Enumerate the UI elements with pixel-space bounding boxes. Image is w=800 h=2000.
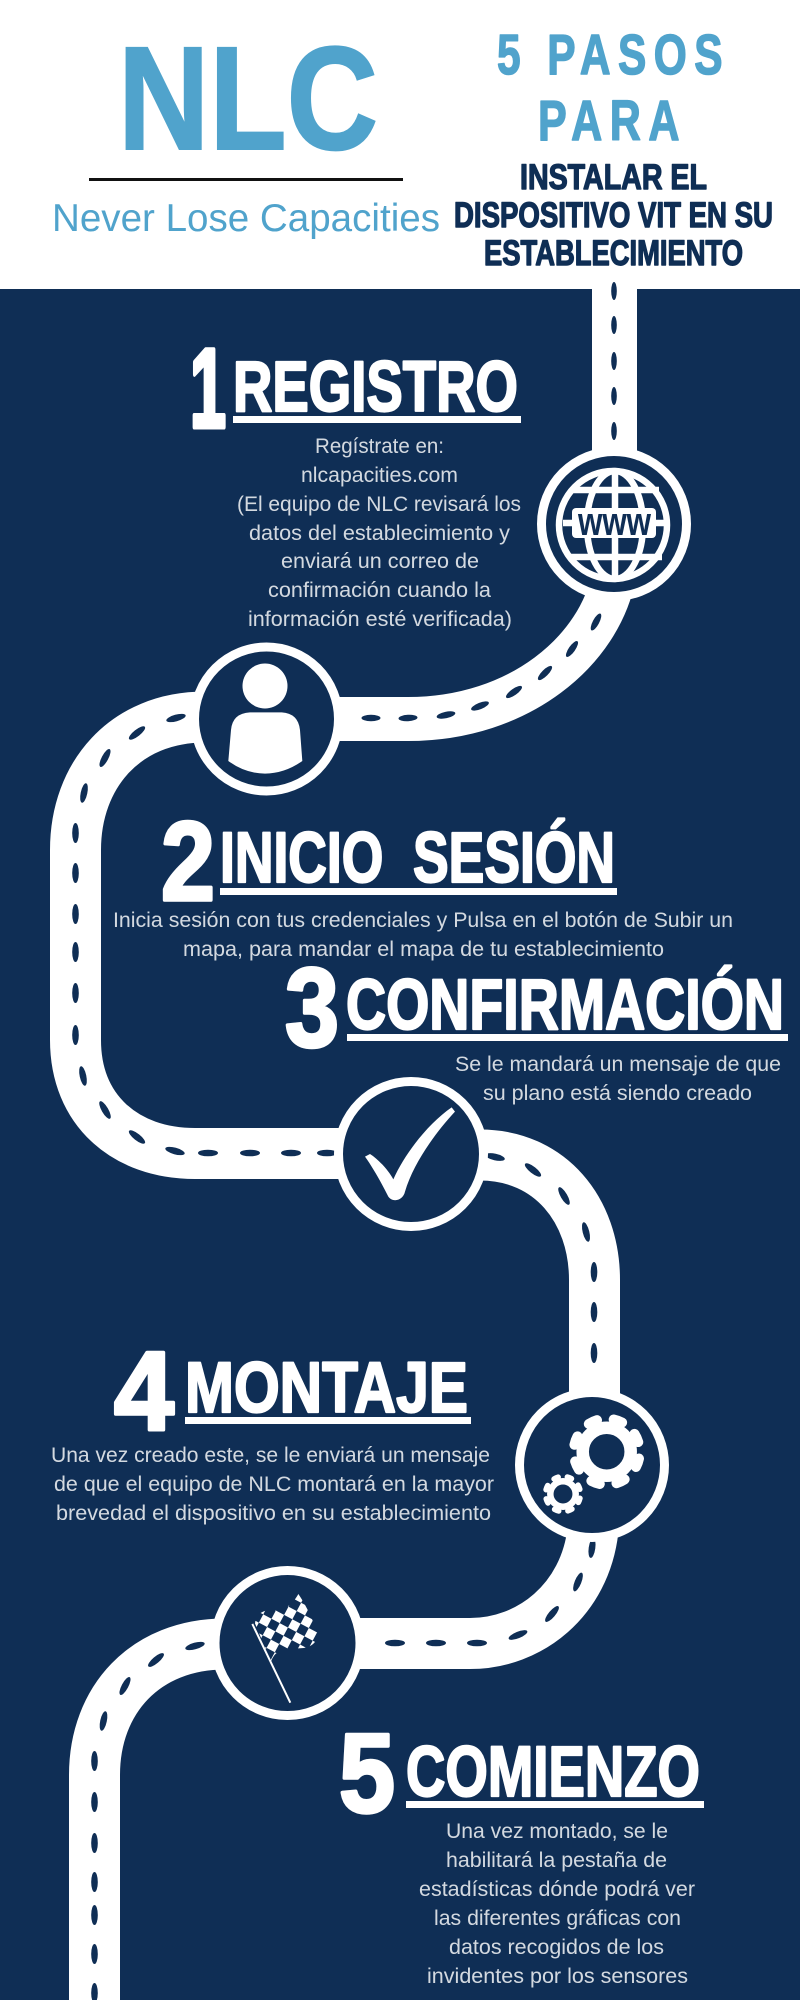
step 4 number: 4	[114, 1329, 174, 1454]
step 2 number: 2	[161, 799, 215, 924]
step 4: montaje	[51, 1329, 494, 1525]
step 1 body text: confirmación cuando la	[268, 579, 491, 602]
road: winding white path	[76, 278, 614, 2000]
icon: globe www: www	[577, 500, 652, 544]
step 2 body text: Inicia sesión con tus credenciales y Pulsa en el botón de Subir un	[113, 909, 733, 932]
step 1 body text: datos del establecimiento y	[249, 522, 511, 545]
road centre dashes	[72, 282, 617, 2000]
step 5 body text	[419, 1820, 695, 1988]
step 3 number: 3	[285, 945, 339, 1070]
step 5 body text: invidentes por los sensores	[427, 1965, 688, 1988]
step 4 underline	[185, 1417, 471, 1424]
step 1: registro	[190, 326, 521, 631]
step 5 body text: las diferentes gráficas con	[434, 1907, 681, 1930]
icon: globe www	[542, 452, 686, 596]
logo title NLC: NLC	[118, 17, 378, 181]
step 1 body text	[237, 435, 521, 631]
step 4 body text: Una vez creado este, se le enviará un mensaje	[51, 1444, 490, 1467]
step 2 title: INICIO SESIÓN	[220, 819, 615, 898]
step 2: inicio sesion	[113, 799, 733, 961]
step 3 body text: su plano está siendo creado	[483, 1082, 752, 1105]
step 4 body text: de que el equipo de NLC montará en la mayor	[54, 1473, 494, 1496]
icon: check mark	[338, 1082, 484, 1226]
step 1 body text: (El equipo de NLC revisará los	[237, 493, 521, 516]
step 1 number: 1	[190, 326, 226, 451]
step 1 body text: nlcapacities.com	[301, 464, 458, 487]
heading: para: PARA	[538, 89, 687, 153]
step 5 number: 5	[339, 1711, 395, 1836]
step 4 body text	[51, 1444, 494, 1525]
step 4 body text: brevedad el dispositivo en su establecimiento	[56, 1502, 491, 1525]
step 3 body text: Se le mandará un mensaje de que	[455, 1053, 781, 1076]
step 5: comienzo	[339, 1711, 704, 1988]
step 1 title: REGISTRO	[233, 348, 518, 427]
step 1 body text: información esté verificada)	[248, 608, 512, 631]
icon: checkered flag	[215, 1570, 360, 1716]
step 5 title: COMIENZO	[406, 1733, 700, 1812]
panel: white header	[0, 0, 800, 289]
step 3 underline	[347, 1034, 788, 1041]
subheading line 1: INSTALAR EL	[520, 158, 707, 197]
step 2 body text: mapa, para mandar el mapa de tu establecimiento	[183, 938, 664, 961]
step 2 body text	[113, 909, 733, 961]
icon: user	[194, 647, 338, 791]
step 2 underline	[220, 888, 617, 895]
logo tagline: Never Lose Capacities	[52, 197, 440, 240]
step 3 body text	[455, 1053, 781, 1105]
step 5 underline	[406, 1801, 704, 1808]
step 1 underline	[233, 416, 521, 423]
logo divider	[89, 178, 403, 181]
step 3: confirmacion	[285, 945, 788, 1105]
step 5 body text: datos recogidos de los	[449, 1936, 664, 1959]
step 4 title: MONTAJE	[185, 1349, 468, 1428]
icon: gears	[520, 1392, 664, 1538]
step 5 body text: habilitará la pestaña de	[446, 1849, 667, 1872]
step 5 body text: estadísticas dónde podrá ver	[419, 1878, 695, 1901]
step 1 body text: Regístrate en:	[315, 435, 444, 458]
step 1 body text: enviará un correo de	[281, 550, 479, 573]
step 5 body text: Una vez montado, se le	[446, 1820, 668, 1843]
